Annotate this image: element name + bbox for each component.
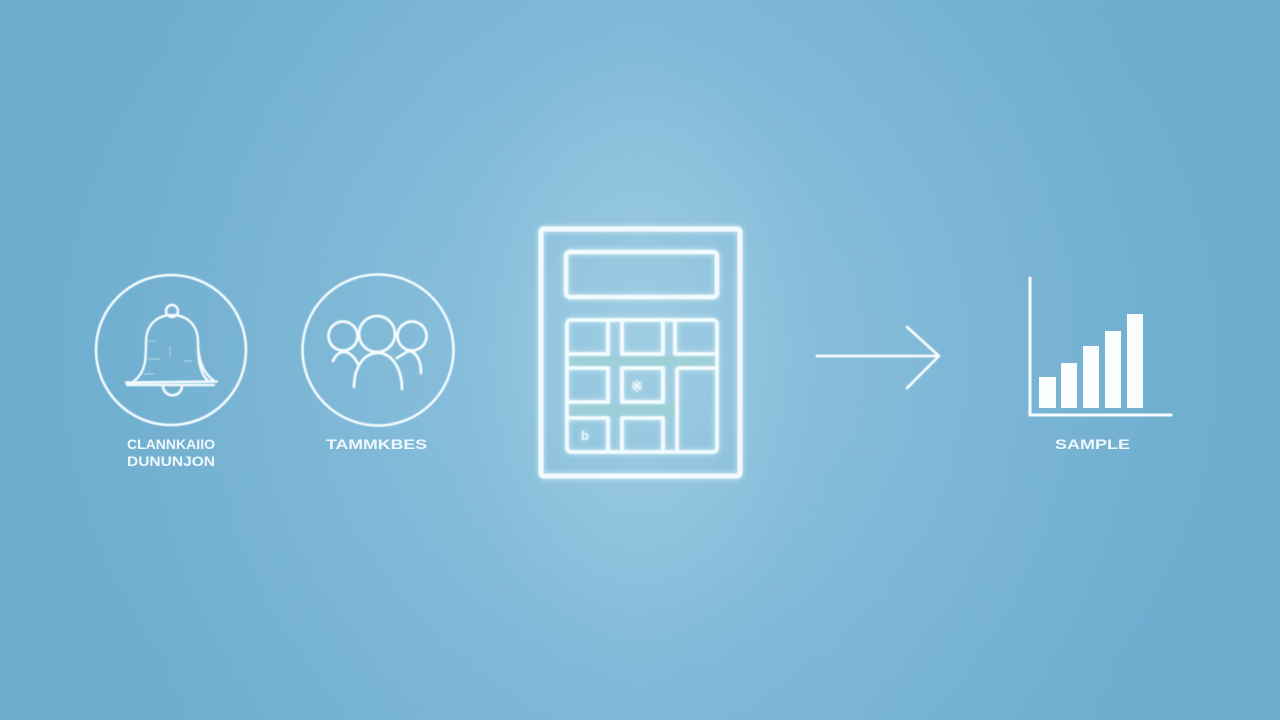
key glyphs: b [581,428,589,443]
calculator body [541,229,740,476]
label: bell: DUNUNJON [127,453,215,469]
bell loop [166,305,178,317]
label: chart: SAMPLE [1055,436,1130,452]
bell outer circle [96,275,246,425]
chart bars [1039,314,1143,408]
icon: calculator [541,229,740,476]
calculator keypad [567,320,717,452]
bell clapper [163,387,182,395]
keypad tinted gaps [569,356,715,416]
bell body [134,315,214,381]
calculator screen [566,252,717,297]
bell highlights [144,341,192,374]
person left [328,322,358,364]
person right [397,322,426,373]
label: bell: CLANNKAIIO [127,436,215,452]
icon: bell in circle [96,275,246,425]
label: bell [127,436,215,469]
bell base [126,382,217,385]
bar chart [1030,278,1171,415]
icon: people in circle [302,274,454,426]
arrow [817,327,939,388]
people outer circle [302,274,454,426]
label: people: TAMMKBES [326,436,427,452]
key glyphs [581,378,643,443]
chart axes [1030,278,1171,415]
key glyphs: ※ [631,378,643,394]
person centre [354,316,402,389]
